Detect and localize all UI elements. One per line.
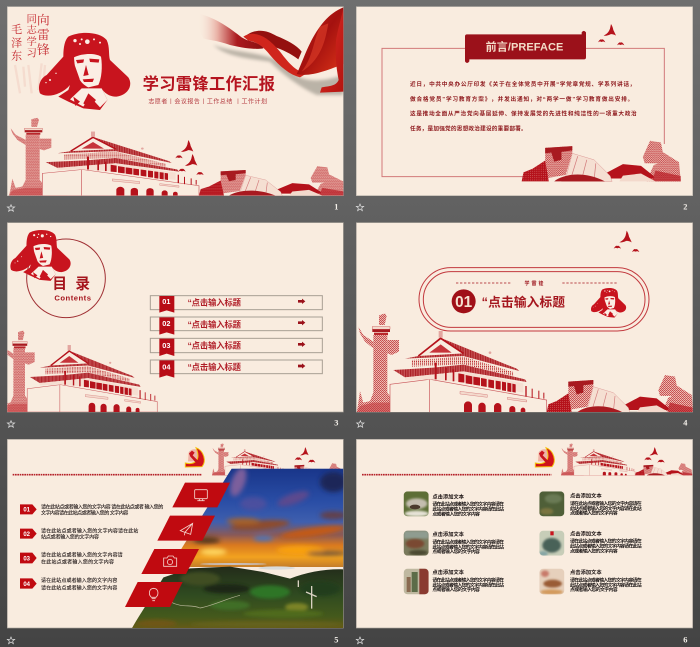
contents item 2: 02 xyxy=(162,319,170,328)
text block 5 xyxy=(432,568,504,593)
parallelogram 2: paper plane xyxy=(157,516,215,541)
star icon xyxy=(356,204,364,211)
slide 2 background xyxy=(356,7,693,196)
header skyline xyxy=(212,444,343,475)
contents item 1: 01 xyxy=(162,297,170,306)
text block 4: 点或者输入您的文字内容 xyxy=(570,547,618,554)
section title: “点击输入标题 xyxy=(482,295,565,310)
thumbnail 5 xyxy=(404,569,429,594)
slide 6 background xyxy=(356,439,693,628)
ribbon lower band xyxy=(243,34,307,77)
text block 3 xyxy=(432,530,504,555)
small heading: 学雷锋 xyxy=(525,280,545,287)
page number: 6 xyxy=(683,635,687,644)
preface text: 做合格党员”学习教育方案》，并发出通知，对“两学一做”学习教育做出安排。 xyxy=(410,95,633,103)
contents heading: 录 xyxy=(75,276,90,293)
contents item 4: “点击输入标题 xyxy=(188,362,242,372)
birds xyxy=(598,24,624,45)
text block 2: 此站点或者输入您的文字内容请在此站 xyxy=(570,505,642,512)
text block 2: 点或者输入您的文字内容 xyxy=(570,510,618,517)
thumbnail 4 xyxy=(539,531,564,556)
list item 4 xyxy=(20,577,117,591)
star icon xyxy=(7,205,15,211)
party emblem xyxy=(535,448,555,467)
landscape photo xyxy=(130,466,347,629)
list item 2: 站点或者输入您的文字内容 xyxy=(41,534,99,541)
text block 3: 点或者输入您的文字内容 xyxy=(432,548,480,555)
page number: 2 xyxy=(683,203,687,212)
star icon xyxy=(7,637,15,644)
ribbon xyxy=(198,7,344,95)
text block 1: 点或者输入您的文字内容 xyxy=(432,510,480,517)
slide 3 background xyxy=(7,223,343,412)
contents item 3 xyxy=(150,338,322,356)
list item 1: 01 xyxy=(23,508,31,514)
number badge: 01 xyxy=(455,294,473,311)
slide 3: contents xyxy=(0,223,343,428)
portrait xyxy=(10,230,71,281)
skyline xyxy=(0,331,157,412)
text block 3: 此站点或者输入您的文字内容请在此站 xyxy=(432,543,504,550)
skyline xyxy=(357,313,693,413)
text block 5: 点或者输入您的文字内容 xyxy=(432,586,480,593)
contents item 2 xyxy=(150,317,322,335)
text block 6: 点或者输入您的文字内容 xyxy=(570,586,618,593)
text block 3: 点击添加文本 xyxy=(432,530,465,538)
preface text: 这是推动全面从严治党向基层延伸、保持发展党的先进性和纯洁性的一项重大政治 xyxy=(410,110,637,118)
text block 4 xyxy=(570,529,642,554)
page number: 3 xyxy=(334,419,338,428)
thumbnail 6 xyxy=(539,569,564,595)
contents item 1: “点击输入标题 xyxy=(188,297,242,307)
page number: 5 xyxy=(334,635,338,644)
slide 4 background xyxy=(356,223,693,412)
list item 1 xyxy=(20,503,163,516)
dashed header line xyxy=(13,472,202,477)
list item 1: 请在此站点或者输入您的文字内容 请在此站点或者 输入您的 xyxy=(41,503,163,510)
list item 2: 02 xyxy=(23,532,31,538)
skyline artwork xyxy=(0,331,157,412)
ribbon tail xyxy=(320,8,344,93)
slide 1 background xyxy=(7,7,343,196)
skyline artwork xyxy=(9,118,346,196)
birds xyxy=(295,447,315,463)
page number: 1 xyxy=(334,203,338,212)
thumbnail 3 xyxy=(404,531,429,556)
text block 6: 请在此站点或者输入您的文字内容请在 xyxy=(570,576,642,583)
list item 3: 请在此站点或者输入您的文字内容请 xyxy=(41,551,123,558)
slide 5 background xyxy=(7,439,343,628)
preface text: 任务，是加强党的思想政治建设的重要部署。 xyxy=(410,125,527,133)
dashed rules xyxy=(456,282,617,284)
text block 5: 请在此站点或者输入您的文字内容请在 xyxy=(432,576,504,583)
contents item 4: 04 xyxy=(162,363,171,372)
list item 3 xyxy=(20,551,123,565)
ribbon upper band xyxy=(247,31,302,59)
scroll banner xyxy=(465,31,586,63)
dashed header line xyxy=(362,472,551,477)
text block 3: 请在此站点或者输入您的文字内容请在 xyxy=(432,538,504,545)
text block 4: 此站点或者输入您的文字内容请在此站 xyxy=(570,543,642,550)
slide 2: preface xyxy=(356,7,693,212)
small portrait xyxy=(591,288,626,318)
thumbnail 1 xyxy=(404,491,429,517)
text block 2: 点击添加文本 xyxy=(570,492,602,500)
star icon xyxy=(356,637,364,644)
parallelogram 3: camera xyxy=(141,549,199,574)
contents circle xyxy=(27,239,105,318)
parallelogram 4: light bulb xyxy=(125,582,183,607)
slide 5: list with photo xyxy=(7,439,347,644)
calligraphy inscription: 向雷锋 xyxy=(34,13,53,57)
text block 6: 此站点或者输入您的文字内容请在此站 xyxy=(570,581,642,588)
subtitle: 志愿者丨会议报告丨工作总结 丨工作计划 xyxy=(148,97,267,105)
calligraphy inscription xyxy=(9,13,53,63)
text block 1: 点击添加文本 xyxy=(432,492,465,500)
ribbon fold xyxy=(297,7,343,75)
great wall illustration xyxy=(522,141,681,181)
slide 6: picture list xyxy=(356,439,693,644)
list item 1: 文字内容请在此站点或者输入您的 文字内容 xyxy=(41,509,128,516)
text block 6: 点击添加文本 xyxy=(570,568,602,576)
text block 1 xyxy=(432,492,504,517)
calligraphy inscription: 毛泽东 xyxy=(9,23,25,63)
text block 6 xyxy=(570,568,642,593)
page number: 4 xyxy=(683,419,688,428)
thumbnail 2 xyxy=(539,491,564,516)
birds xyxy=(644,447,665,463)
calligraphy inscription: 同志学习 xyxy=(24,13,39,59)
text block 1: 此站点或者输入您的文字内容请在此站 xyxy=(432,506,504,513)
section pill frame xyxy=(419,268,649,331)
star icon xyxy=(357,421,364,427)
star icon xyxy=(7,421,15,427)
skyline artwork xyxy=(212,444,343,475)
contents item 4 xyxy=(150,360,322,378)
portrait of Lei Feng xyxy=(39,33,130,110)
number badge xyxy=(452,289,476,313)
preface text xyxy=(410,80,637,133)
list item 4: 04 xyxy=(23,582,31,588)
main title: 学习雷锋工作汇报 xyxy=(143,74,275,93)
parallelogram 1: monitor xyxy=(172,483,230,507)
skyline artwork xyxy=(357,313,693,413)
text block 2 xyxy=(570,492,642,517)
list item 3: 03 xyxy=(23,556,31,562)
list item 4: 请在此站点或者输入您的文字内容 xyxy=(41,584,117,591)
text block 5: 此站点或者输入您的文字内容请在此站 xyxy=(432,581,504,588)
text block 1: 请在此站点或者输入您的文字内容请在 xyxy=(432,501,504,508)
text block 5: 点击添加文本 xyxy=(432,568,465,576)
header skyline xyxy=(561,444,692,475)
contents item 3: “点击输入标题 xyxy=(188,340,242,350)
slide 1: title slide xyxy=(7,7,346,212)
frame xyxy=(382,48,664,177)
list item 4: 请在此站点或者输入您的文字内容 xyxy=(41,577,117,584)
list item 2: 请在此站点或者输入您的文字内容请在此站 xyxy=(41,527,138,534)
text block 4: 点击添加文本 xyxy=(570,529,602,537)
contents item 2: “点击输入标题 xyxy=(188,320,242,330)
banner title: 前言/PREFACE xyxy=(486,40,563,54)
slide 4: section header xyxy=(356,223,693,428)
birds xyxy=(614,231,639,252)
preface text: 近日，中共中央办公厅印发《关于在全体党员中开展“学党章党规、学系列讲话， xyxy=(410,80,635,88)
skyline artwork xyxy=(561,444,692,475)
ribbon highlight xyxy=(302,23,328,72)
text block 2: 请在此站点或者输入您的文字内容请在 xyxy=(570,500,642,507)
ribbon strip xyxy=(205,16,264,49)
ribbon shadow xyxy=(213,45,343,95)
text block 4: 请在此站点或者输入您的文字内容请在 xyxy=(570,538,642,545)
skyline illustration xyxy=(9,118,346,196)
contents item 1 xyxy=(150,296,322,313)
contents heading: 目 xyxy=(52,277,67,293)
list item 2 xyxy=(20,527,138,541)
calligraphy reflection xyxy=(15,63,45,93)
birds xyxy=(175,140,204,175)
party emblem xyxy=(185,448,205,467)
list item 3: 在此站点或者输入您的文字内容 xyxy=(41,558,114,565)
contents heading xyxy=(52,276,91,302)
contents item 3: 03 xyxy=(162,341,170,350)
contents heading: Contents xyxy=(54,293,91,302)
